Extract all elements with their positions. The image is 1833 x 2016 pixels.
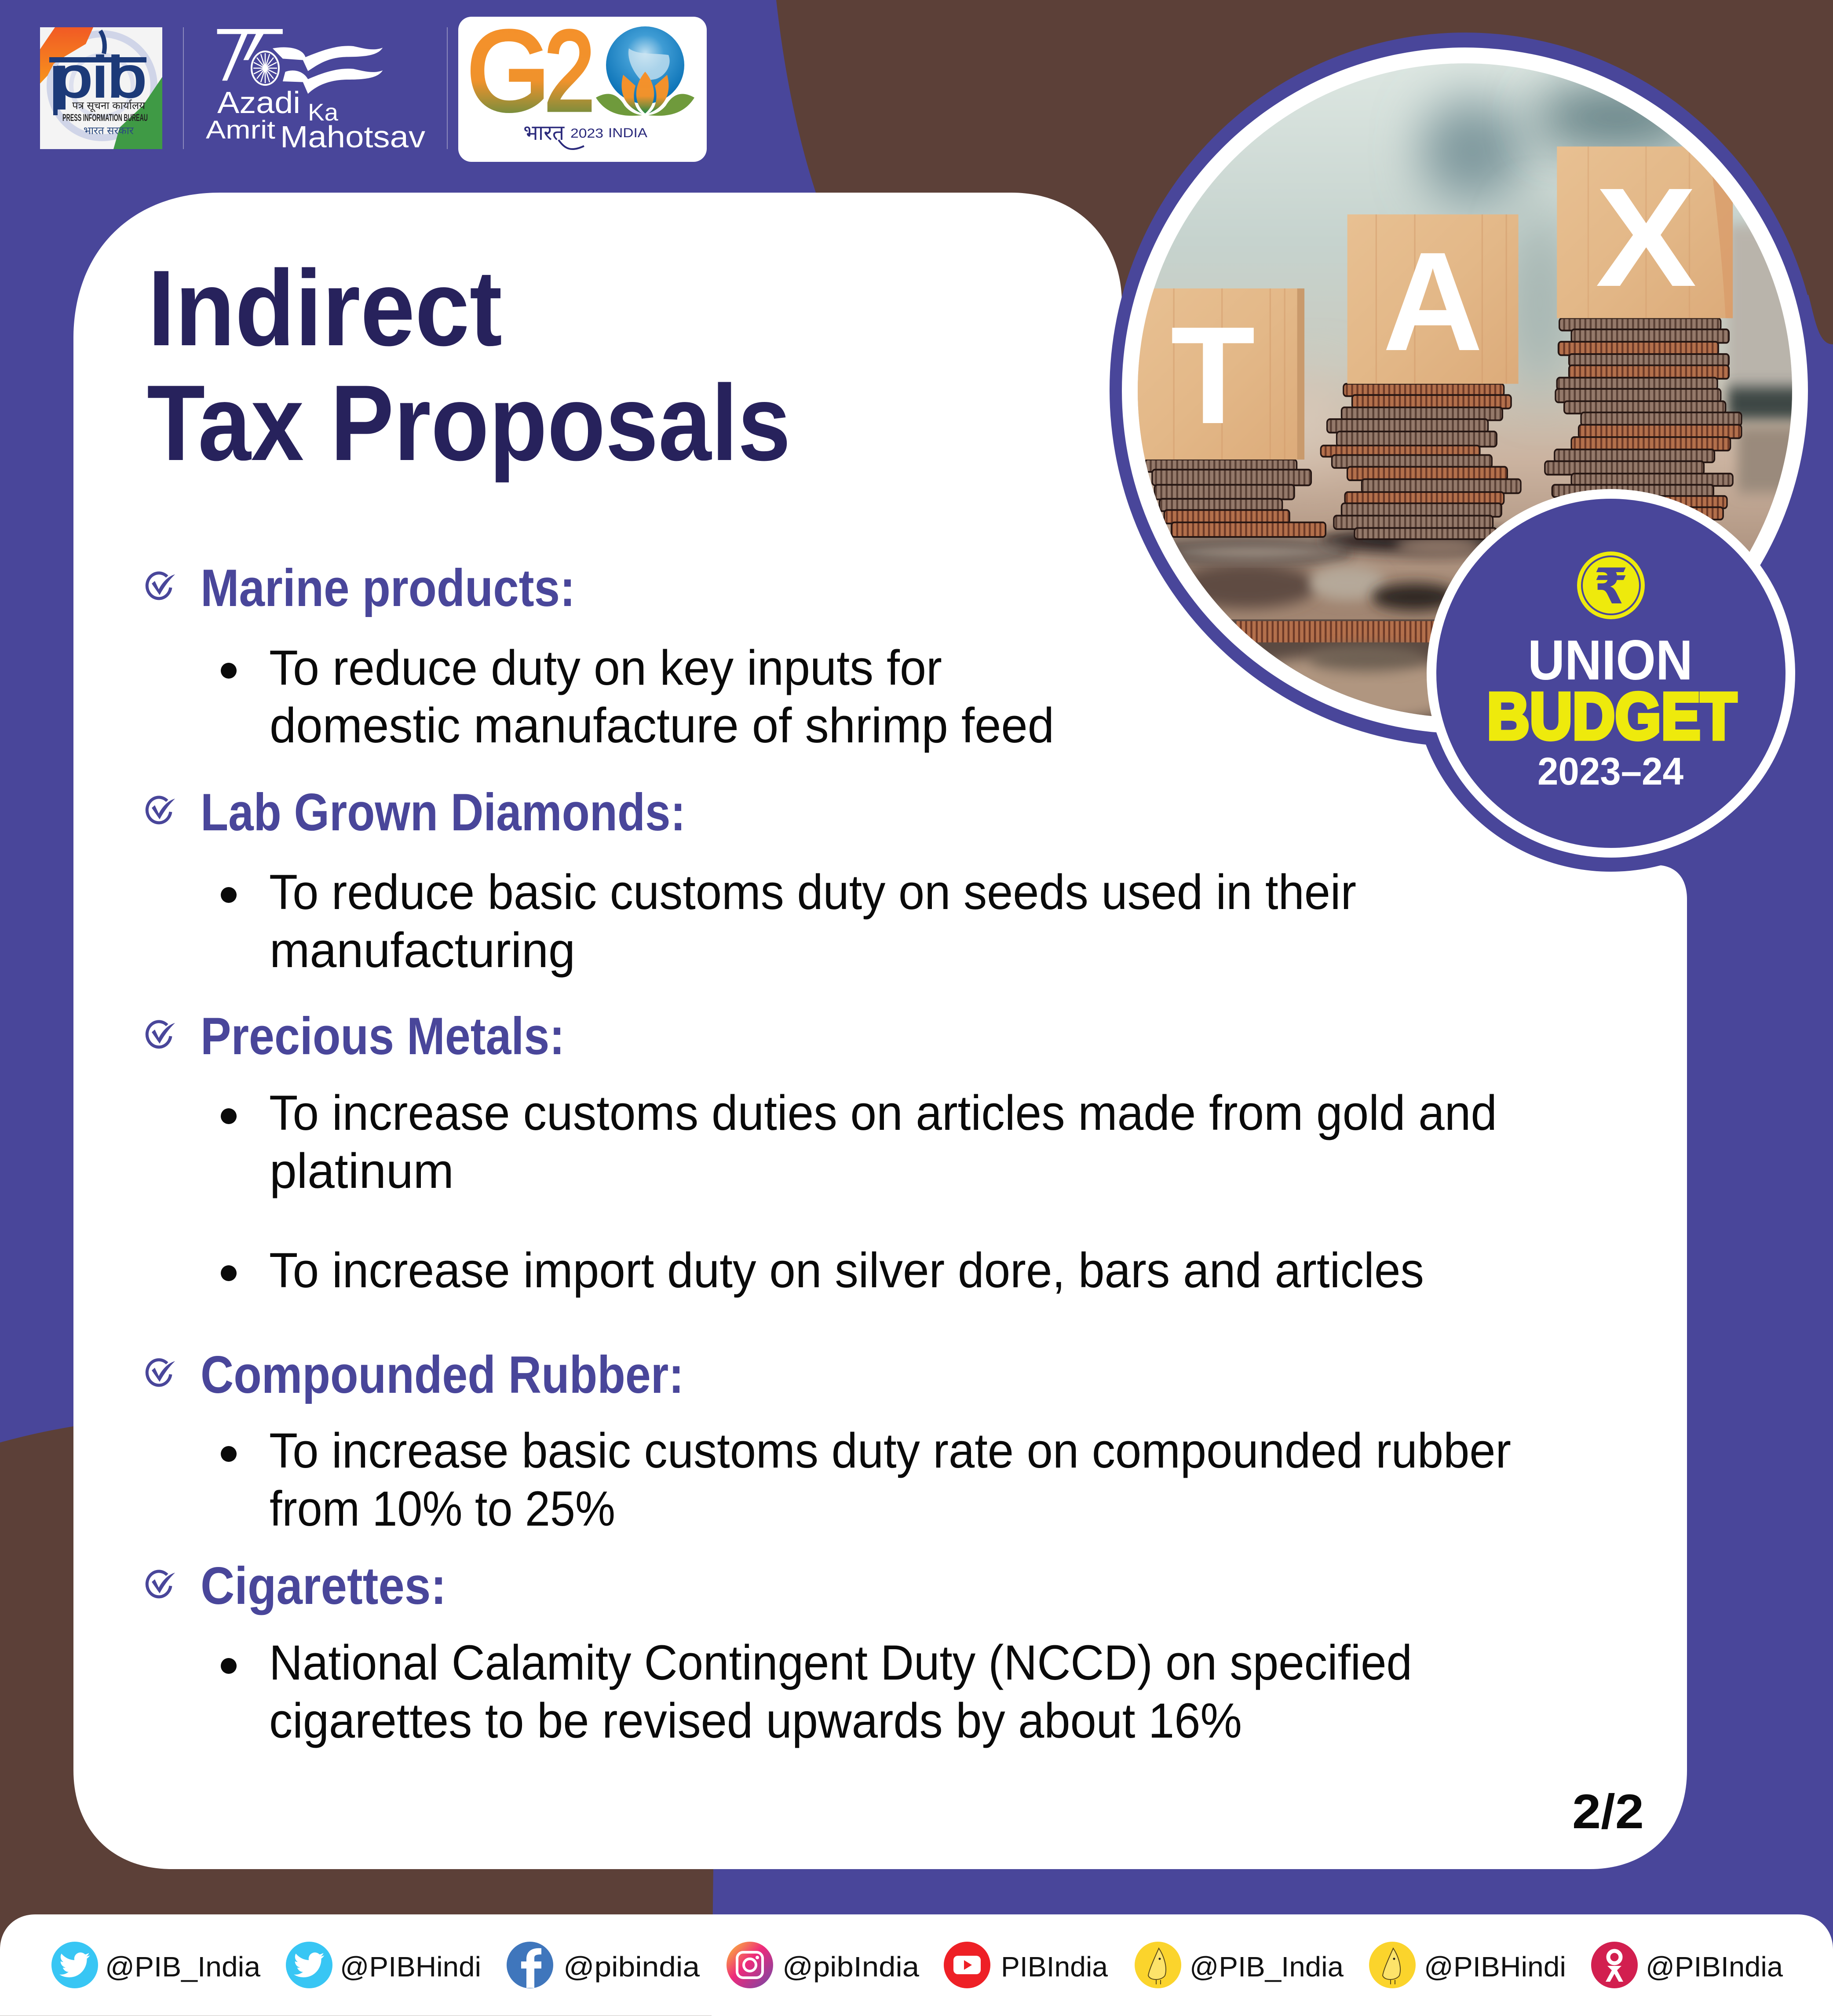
body text: platinum <box>270 1143 454 1198</box>
body text <box>269 1423 1511 1536</box>
handle: @pibIndia <box>782 1951 919 1983</box>
bullet <box>221 663 237 679</box>
body text: National Calamity Contingent Duty (NCCD) on specified <box>269 1635 1412 1690</box>
heading: Marine products: <box>201 559 575 617</box>
background: brown top-right shape <box>776 0 1833 396</box>
icon: check <box>147 1571 175 1597</box>
photo: TAX wooden blocks on coin stacks <box>1138 63 1792 716</box>
logo: Press Information Bureau: भारत सरकार <box>84 125 134 137</box>
title: Tax Proposals <box>147 362 791 483</box>
icon: facebook <box>507 1942 553 1988</box>
bullet <box>221 1658 237 1674</box>
icon: rupee coin <box>1577 551 1645 619</box>
logo: G20 India 2023: भारत <box>523 121 565 145</box>
logo: Azadi Ka Amrit Mahotsav: Ka <box>308 99 338 126</box>
section: Cigarettes <box>147 1556 1412 1748</box>
coin stack: T <box>1145 460 1325 537</box>
icon: check <box>147 573 175 599</box>
bullet <box>221 1446 237 1462</box>
body text <box>269 1635 1412 1748</box>
coin stack: A <box>1321 384 1521 539</box>
section: Precious Metals <box>147 1007 1497 1298</box>
body text <box>269 865 1356 978</box>
handle: @PIB_India <box>1190 1951 1344 1983</box>
badge: Union Budget 2023-24: UNION <box>1528 629 1693 692</box>
ashoka chakra <box>252 51 279 85</box>
body text: cigarettes to be revised upwards by about 16% <box>269 1693 1242 1748</box>
footer social handles <box>51 1942 1783 1988</box>
letter X: X <box>1596 158 1698 316</box>
handle: @pibindia <box>563 1951 700 1983</box>
photo circle outer purple ring <box>1110 33 1820 747</box>
wooden block: X <box>1557 146 1733 318</box>
icon: check <box>147 797 175 823</box>
body text: from 10% to 25% <box>270 1481 615 1536</box>
heading: Cigarettes: <box>201 1556 446 1615</box>
body text <box>269 1085 1497 1198</box>
bullet <box>221 887 237 903</box>
bullet <box>221 1108 237 1124</box>
logo: Azadi Ka Amrit Mahotsav: Amrit <box>206 116 275 144</box>
logo: Press Information Bureau: PRESS INFORMATION BUREAU <box>62 112 148 123</box>
background: brown bottom-left shape <box>0 1418 713 2016</box>
body text <box>269 640 1054 753</box>
wooden block: A <box>1347 214 1519 384</box>
bullet <box>221 1265 237 1281</box>
icon: youtube <box>944 1942 990 1988</box>
badge: Union Budget 2023-24 <box>1431 494 1790 853</box>
icon: red person logo <box>1591 1942 1638 1988</box>
body text: domestic manufacture of shrimp feed <box>270 698 1054 753</box>
logo: Press Information Bureau: pib <box>54 45 146 109</box>
icon: koo <box>1135 1942 1181 1988</box>
body text: To reduce basic customs duty on seeds used in their <box>269 865 1356 920</box>
logo: G20 India 2023 <box>458 7 707 162</box>
handle: @PIBIndia <box>1646 1951 1783 1983</box>
heading: Compounded Rubber: <box>201 1345 684 1404</box>
logo: G20 India 2023: 2 <box>544 7 595 134</box>
badge: Union Budget 2023-24: 2023–24 <box>1537 749 1683 793</box>
icon: rupee coin: ₹ <box>1594 559 1628 614</box>
badge: Union Budget 2023-24: BUDGET <box>1487 679 1737 753</box>
handle: @PIB_India <box>105 1951 260 1983</box>
logo: Azadi Ka Amrit Mahotsav: Azadi <box>217 85 300 120</box>
logo: G20 India 2023: G <box>467 7 550 134</box>
footer bar <box>0 1914 1833 2016</box>
handle: @PIBHindi <box>1424 1951 1566 1983</box>
icon: twitter <box>51 1942 98 1988</box>
logo: Azadi Ka Amrit Mahotsav: Mahotsav <box>280 120 425 154</box>
handle: PIBIndia <box>1001 1951 1108 1983</box>
page number: 2/2 <box>1572 1785 1644 1839</box>
title <box>147 248 791 483</box>
heading: Lab Grown Diamonds: <box>201 783 686 842</box>
icon: twitter <box>286 1942 332 1988</box>
divider lines beside logos <box>183 27 448 149</box>
icon: koo <box>1369 1942 1416 1988</box>
title: Indirect <box>148 248 502 368</box>
body text: To increase import duty on silver dore, bars and articles <box>269 1243 1424 1298</box>
letter A: A <box>1383 223 1483 380</box>
body text: manufacturing <box>270 923 575 978</box>
section: Compounded Rubber <box>147 1345 1511 1536</box>
icon: instagram <box>727 1942 773 1988</box>
body text: To increase customs duties on articles made from gold and <box>269 1085 1497 1140</box>
icon: check <box>147 1022 175 1047</box>
body text: To increase basic customs duty rate on compounded rubber <box>269 1423 1511 1478</box>
logo: G20 India 2023: 2023 <box>570 126 603 141</box>
badge: outer purple backing <box>1413 475 1809 872</box>
logo: G20 India 2023: INDIA <box>608 126 647 140</box>
logo: Azadi Ka Amrit Mahotsav <box>206 29 425 154</box>
letter T: T <box>1171 298 1255 453</box>
handle: @PIBHindi <box>340 1951 481 1983</box>
logo: Press Information Bureau <box>40 27 162 149</box>
logo: Press Information Bureau: पत्र सूचना कार्यालय <box>72 99 146 112</box>
panel: main white card <box>73 193 1687 1869</box>
section: Marine products <box>147 559 1054 753</box>
section: Lab Grown Diamonds <box>147 783 1356 978</box>
icon: check <box>147 1360 175 1385</box>
wooden block: T <box>1135 289 1304 460</box>
heading: Precious Metals: <box>201 1007 565 1066</box>
body text: To reduce duty on key inputs for <box>269 640 942 695</box>
photo circle white ring <box>1122 47 1808 734</box>
coin stack: X <box>1545 318 1742 519</box>
